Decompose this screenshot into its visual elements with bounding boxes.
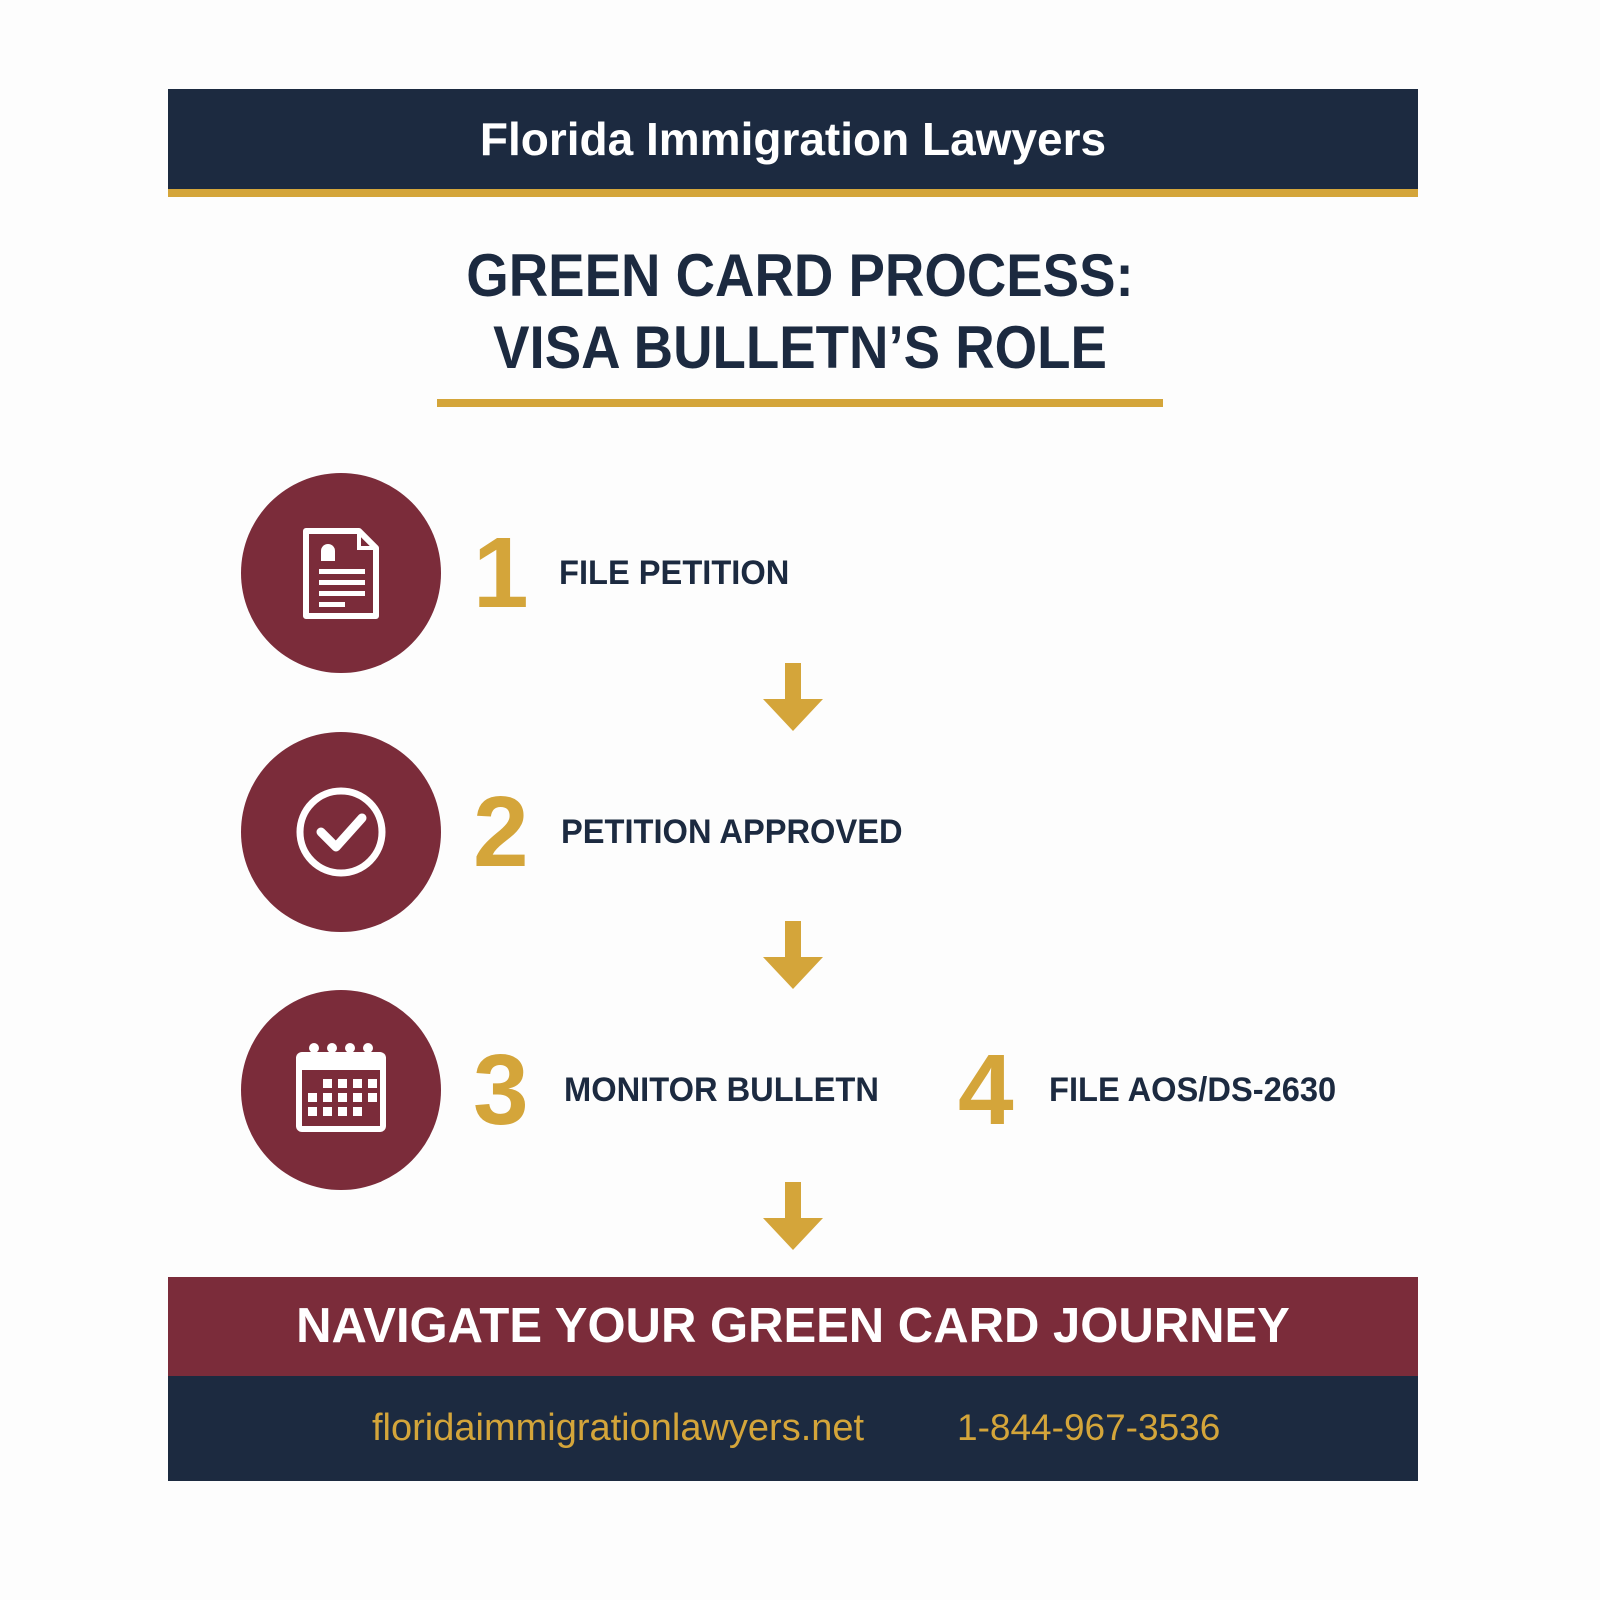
CTA banner [168,1277,1418,1376]
title: GREEN CARD PROCESS: [466,242,1134,309]
CTA banner: NAVIGATE YOUR GREEN CARD JOURNEY [296,1299,1290,1353]
arrow 3 [763,1182,823,1250]
label: PETITION APPROVED [561,813,903,851]
step 1 [241,473,789,673]
arrow 1 [763,663,823,731]
header text: Florida Immigration Lawyers [480,113,1106,165]
icon: document [241,473,441,673]
title: VISA BULLETN’S ROLE [493,314,1107,381]
number 3: 3 [473,1034,529,1146]
step 2 [241,732,903,932]
step 3 [241,990,879,1190]
phone: 1-844-967-3536 [957,1407,1220,1448]
label: FILE AOS/DS-2630 [1049,1071,1336,1109]
website: floridaimmigrationlawyers.net [372,1407,864,1449]
title underline [437,399,1163,407]
title [466,242,1134,381]
label: MONITOR BULLETN [564,1071,879,1109]
footer [168,1277,1418,1481]
icon: calendar [241,990,441,1190]
header bar [168,89,1418,197]
icon: check [241,732,441,932]
label: FILE PETITION [559,554,789,592]
arrow 2 [763,921,823,989]
number 1: 1 [473,517,529,629]
contact bar [168,1376,1418,1481]
step 4 [958,1034,1336,1146]
number 2: 2 [473,776,529,888]
number 4: 4 [958,1034,1014,1146]
